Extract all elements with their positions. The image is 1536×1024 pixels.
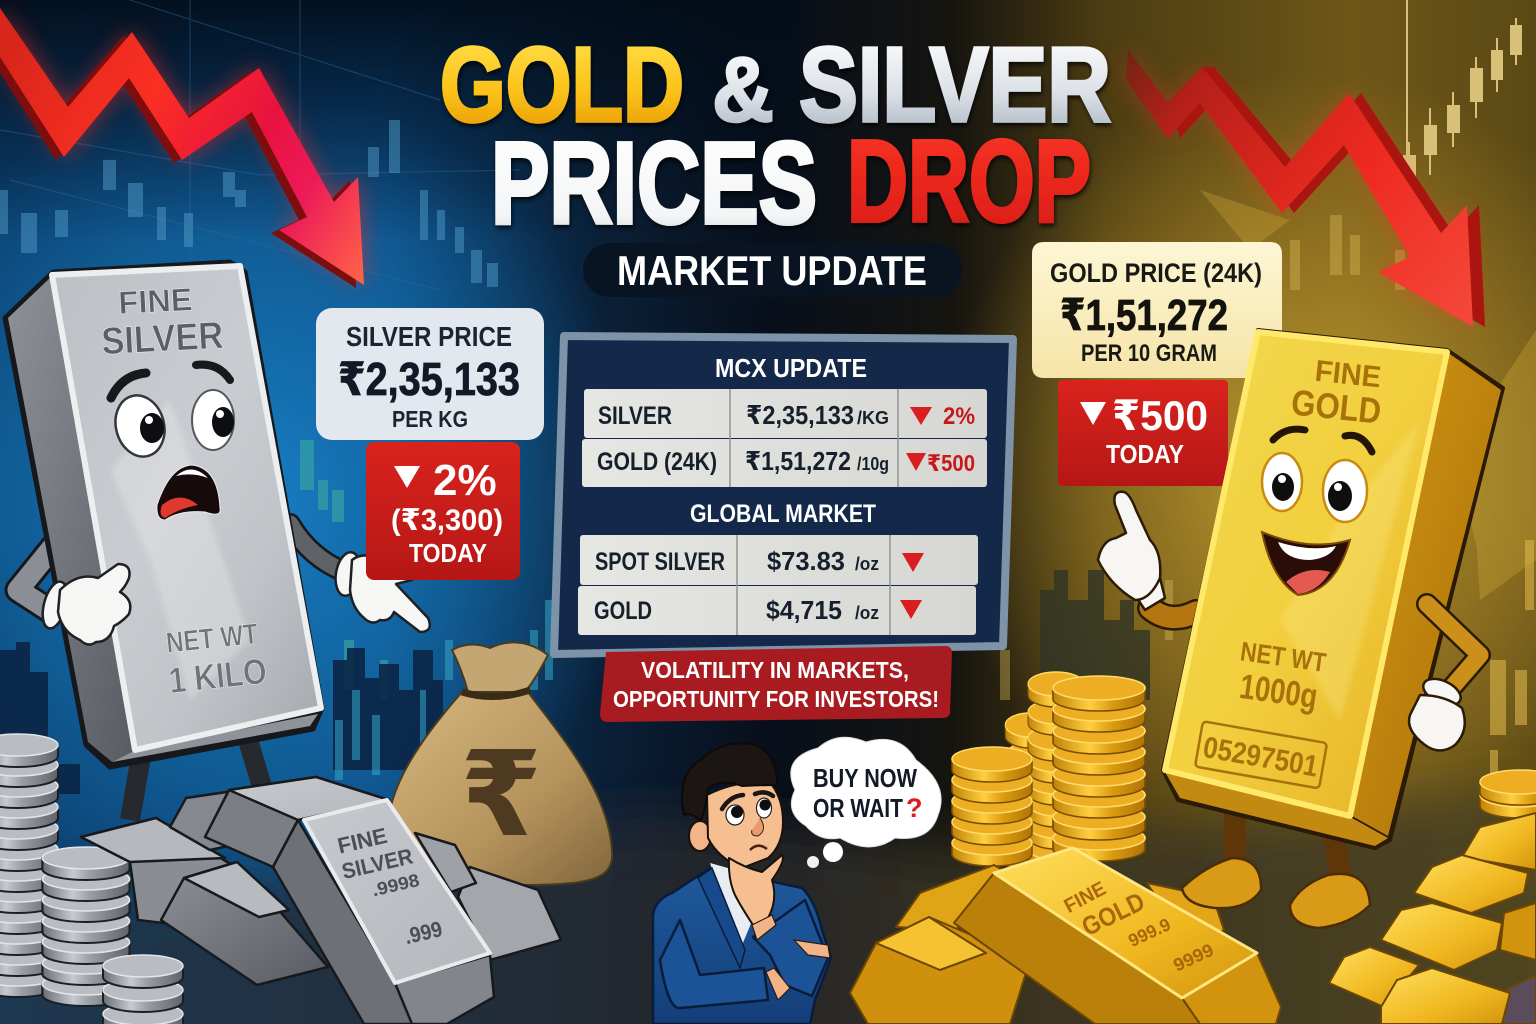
silver drop box: 2%: [433, 456, 497, 505]
investor lapel: [698, 868, 745, 968]
gold drop box: ₹500: [1112, 392, 1208, 439]
table: MCX rows: /KG: [857, 408, 889, 428]
thought bubble: OR WAIT: [813, 793, 903, 823]
silver drop box: TODAY: [409, 538, 487, 568]
silver arms: [18, 524, 345, 612]
silver bar engraved text: FINE: [118, 281, 193, 321]
gold legs and shoes: [1182, 805, 1370, 928]
table: global rows: [578, 535, 978, 635]
investor character: [653, 743, 831, 1024]
red arrow: gold side: [1126, 50, 1485, 327]
investor face: [722, 792, 773, 850]
market update pill: MARKET UPDATE: [617, 247, 927, 294]
title: SILVER: [799, 26, 1111, 144]
silver bar engraved text: [100, 281, 269, 701]
background chart: gold side candles: [1000, 215, 1405, 700]
money bag: [388, 642, 612, 885]
thought bubble: BUY NOW: [813, 763, 917, 793]
heading: MCX update: MCX UPDATE: [715, 353, 867, 383]
centre low bar: [161, 862, 328, 985]
investor shirt and tie: [710, 863, 765, 950]
rupee symbol on bag: ₹: [460, 729, 542, 861]
investor crossed arms: [660, 920, 768, 1008]
silver bars pile: [81, 777, 561, 1024]
silver bar stamp text: [335, 823, 445, 949]
investor suit: [653, 868, 831, 1024]
background chart: teal candles: [256, 395, 388, 700]
long side: [273, 820, 447, 1024]
main top surface: [304, 800, 490, 983]
investor hair: [682, 743, 777, 820]
back right bar: [1147, 883, 1224, 950]
table: global rows: SPOT SILVER: [595, 548, 725, 576]
table: global rows: GOLD: [594, 597, 652, 625]
main bar top: [994, 848, 1257, 998]
background chart: gold side skyline: [1040, 570, 1150, 700]
table: MCX rows: ₹500: [927, 450, 975, 476]
background chart: blue candlesticks: [0, 120, 498, 287]
stacked bars: [1462, 813, 1536, 870]
gold drop box: TODAY: [1106, 439, 1184, 469]
table: global rows: /oz: [855, 603, 879, 623]
callout banner: OPPORTUNITY FOR INVESTORS!: [613, 686, 939, 712]
top coin: [1480, 770, 1536, 818]
gold price card: GOLD PRICE (24K): [1050, 258, 1262, 288]
title: &: [712, 39, 774, 141]
back right bars: [458, 867, 561, 960]
table: MCX rows: [582, 389, 987, 487]
gold arms: [1150, 608, 1196, 618]
table: MCX rows: GOLD (24K): [597, 448, 717, 476]
table: MCX rows: SILVER: [598, 402, 672, 430]
silver coin stack middle: [42, 847, 130, 1006]
silver price card: PER KG: [392, 406, 468, 432]
title: PRICES: [491, 118, 817, 248]
gold price card: [1032, 242, 1282, 378]
callout banner: [600, 646, 952, 722]
silver bar engraved text: SILVER: [100, 315, 224, 363]
silver bar stamp text: FINE: [335, 823, 389, 858]
silver coin stack left: [0, 734, 58, 997]
title: GOLD: [440, 26, 684, 144]
main bar side: [954, 873, 1200, 1024]
silver coin stack front: [103, 955, 183, 1024]
title: [440, 26, 1111, 248]
heading: global market: GLOBAL MARKET: [690, 500, 876, 528]
gold bar stamp text: 999.9: [1125, 914, 1174, 951]
gold bar engraved text: FINE: [1313, 355, 1383, 394]
small back stack: [1005, 713, 1055, 873]
table: MCX rows: 2%: [943, 403, 975, 430]
silver bar stamp text: .999: [402, 916, 445, 949]
back left bar: [896, 865, 1020, 930]
background chart: gold candlesticks: [1403, 0, 1534, 790]
table: global rows: /oz: [855, 554, 879, 574]
gold bar engraved text: GOLD: [1289, 381, 1383, 432]
silver drop box: [366, 442, 520, 580]
thought bubble: [791, 737, 941, 868]
table: global rows: $4,715: [766, 595, 842, 625]
main bar end: [1182, 953, 1281, 1024]
gold bar engraved text: 1000g: [1237, 667, 1320, 716]
rear bar: [170, 790, 300, 850]
far corner: [205, 777, 389, 867]
table: MCX rows: /10g: [857, 454, 889, 474]
gold price card: ₹1,51,272: [1060, 291, 1228, 340]
gold bar stamp text: [1061, 878, 1217, 976]
title: DROP: [847, 116, 1091, 246]
table: MCX rows: ₹1,51,272: [745, 446, 851, 476]
table: MCX rows: ₹2,35,133: [746, 400, 854, 430]
gold gloves: [1098, 492, 1465, 750]
gold bar stamp text: GOLD: [1077, 886, 1149, 942]
gold face: [1262, 429, 1372, 595]
gold drop box: [1058, 380, 1228, 486]
thought bubble: ?: [906, 793, 922, 823]
silver bar stamp text: .9998: [370, 870, 421, 900]
gold price card: PER 10 GRAM: [1081, 340, 1217, 367]
background: gold streaks: [1200, 190, 1536, 600]
red arrow: silver side: [0, 8, 364, 288]
left stack: [952, 831, 1032, 866]
silver face: [109, 365, 234, 520]
silver price card: SILVER PRICE: [346, 321, 512, 352]
gold bars right pile: [1329, 770, 1536, 1024]
gold bar body: [1163, 330, 1503, 848]
silver bar engraved text: 1 KILO: [167, 650, 269, 701]
bar end: [395, 955, 494, 1024]
character: silver bar: [5, 262, 430, 820]
tall back stack: [1028, 672, 1084, 871]
silver drop box: (₹3,300): [391, 504, 503, 537]
centre panel: market table: [554, 336, 1013, 654]
callout banner: VOLATILITY IN MARKETS,: [641, 657, 909, 683]
investor head: [712, 840, 760, 870]
silver price card: [316, 308, 544, 440]
left back bar: [81, 818, 240, 925]
background chart: blue skyline: [0, 642, 443, 794]
silver bar engraved text: NET WT: [165, 618, 260, 660]
gold coin stacks: [952, 672, 1145, 873]
silver gloves: [38, 550, 430, 645]
investor cuff and fingers: [752, 915, 830, 1000]
silver bar stamp text: SILVER: [339, 843, 415, 884]
background chart: skyline candles: [335, 600, 553, 780]
gold bar engraved text: NET WT: [1239, 636, 1328, 678]
silver legs: [130, 740, 266, 820]
investor hand at chin: [729, 855, 783, 925]
left low bar: [850, 917, 1030, 1024]
table: global rows: $73.83: [767, 546, 845, 576]
silver bar body: [5, 262, 322, 767]
silver price card: ₹2,35,133: [338, 353, 520, 405]
background chart: grid lines left: [0, 0, 520, 300]
gold bar stamp text: FINE: [1061, 878, 1110, 918]
gold bar stamp text: 9999: [1170, 940, 1217, 976]
silver highlights: [110, 400, 250, 700]
gold bar serial plate: 05297501: [1201, 731, 1321, 784]
gold bars pile: [850, 848, 1281, 1024]
gold right arm on hip: [1427, 604, 1480, 692]
front stack: [1053, 676, 1145, 861]
character: gold bar: [1098, 330, 1503, 928]
gold bar engraved text: [1237, 355, 1383, 716]
